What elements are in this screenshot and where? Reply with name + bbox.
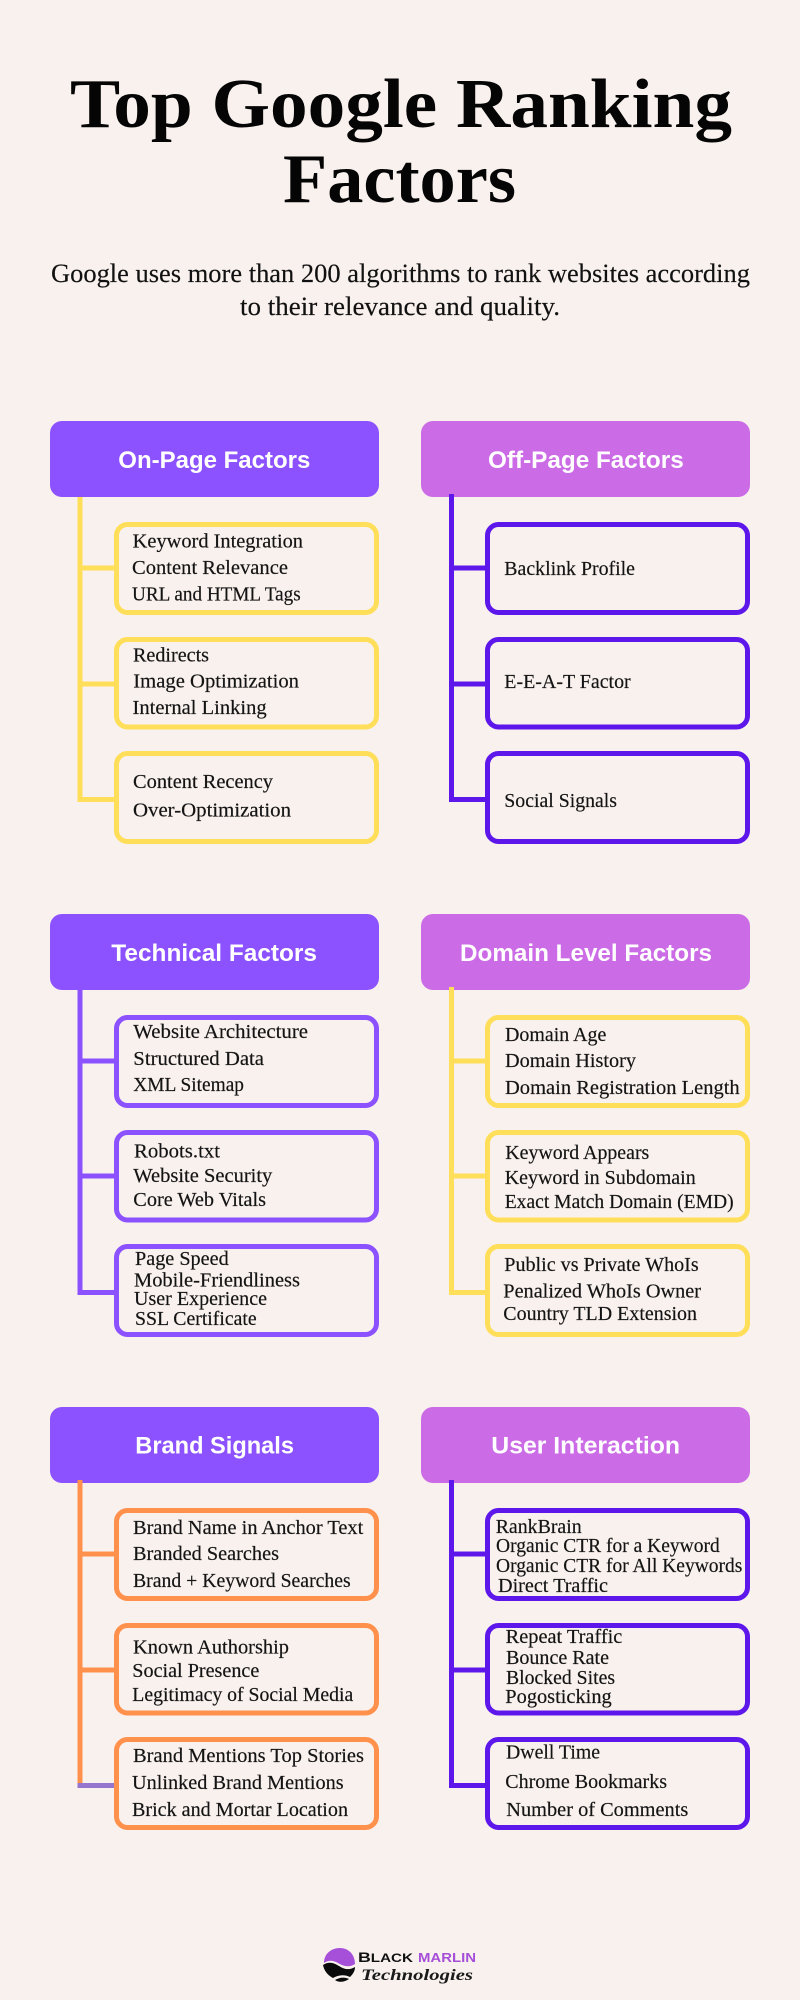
card: dwell time group xyxy=(488,1740,748,1828)
connector: brand lower branch xyxy=(78,1783,118,1788)
card: robots.txt group: Robots.txt xyxy=(134,1141,220,1163)
card: dwell time group: Dwell Time xyxy=(506,1742,600,1764)
title: Factors xyxy=(283,141,516,218)
card: whois group: Country TLD Extension xyxy=(503,1303,697,1325)
card: dwell time group: Number of Comments xyxy=(506,1799,689,1821)
card: brand name group xyxy=(116,1510,376,1598)
card: content recency group xyxy=(116,754,376,842)
heading: user interaction xyxy=(421,1407,750,1483)
card: domain age group: Domain History xyxy=(505,1050,636,1072)
card: whois group xyxy=(488,1246,748,1334)
card: brand name group: Branded Searches xyxy=(133,1543,279,1565)
card: redirects group xyxy=(116,640,376,727)
card: website architecture group xyxy=(116,1018,376,1106)
card: domain age group: Domain Registration Length xyxy=(505,1077,740,1099)
card: repeat traffic group: Blocked Sites xyxy=(506,1667,615,1689)
panel: technical factors xyxy=(50,914,379,1334)
connector: domain tree xyxy=(449,987,488,1292)
card: known authorship group: Social Presence xyxy=(132,1660,259,1682)
card: page speed group: Mobile-Friendliness xyxy=(134,1270,300,1292)
card: brand mentions group: Unlinked Brand Mentions xyxy=(132,1772,344,1794)
card: keyword appears group: Keyword Appears xyxy=(505,1142,650,1164)
card: repeat traffic group xyxy=(488,1626,748,1713)
card: repeat traffic group: Bounce Rate xyxy=(506,1647,609,1669)
card: keyword integration group: Keyword Integration xyxy=(133,531,303,553)
card: e-e-a-t factor: E-E-A-T Factor xyxy=(504,671,631,693)
logo wordmark xyxy=(358,1949,476,1984)
card: website architecture group: Website Architecture xyxy=(133,1021,308,1043)
card: brand name group: Brand Name in Anchor Text xyxy=(133,1517,364,1539)
card: brand mentions group: Brand Mentions Top Stories xyxy=(133,1745,364,1767)
icon: marlin globe xyxy=(323,1948,355,1982)
card: dwell time group: Chrome Bookmarks xyxy=(505,1771,667,1793)
card: redirects group: Image Optimization xyxy=(133,671,299,693)
card: content recency group: Over-Optimization xyxy=(133,800,291,822)
card: page speed group xyxy=(116,1246,376,1334)
card: social signals: Social Signals xyxy=(504,790,617,812)
card: whois group: Public vs Private WhoIs xyxy=(504,1254,699,1276)
card: keyword appears group: Keyword in Subdomain xyxy=(505,1167,696,1189)
heading: technical factors xyxy=(50,914,379,990)
card: repeat traffic group: Pogosticking xyxy=(505,1686,612,1708)
title: Top Google Ranking xyxy=(70,66,732,143)
heading: off-page factors: Off-Page Factors xyxy=(488,447,684,474)
heading: brand signals: Brand Signals xyxy=(135,1432,294,1460)
card: backlink profile: Backlink Profile xyxy=(504,558,635,580)
card: keyword integration group: Content Relevance xyxy=(132,557,288,579)
card: keyword appears group xyxy=(488,1132,748,1220)
card: redirects group: Internal Linking xyxy=(132,697,267,719)
connector: user interaction tree xyxy=(449,1480,488,1788)
subtitle: to their relevance and quality. xyxy=(240,292,560,321)
heading: on-page factors: On-Page Factors xyxy=(118,447,310,474)
card: keyword integration group xyxy=(116,524,376,612)
connector: technical tree xyxy=(78,990,116,1292)
panel: domain level factors xyxy=(421,914,750,1334)
card: backlink profile xyxy=(488,524,748,612)
connector: brand tree xyxy=(78,1480,116,1788)
heading: domain level factors: Domain Level Factors xyxy=(460,940,712,967)
heading: domain level factors xyxy=(421,914,750,990)
card: domain age group: Domain Age xyxy=(505,1024,606,1046)
card: content recency group: Content Recency xyxy=(133,771,273,793)
logo wordmark: MARLIN xyxy=(418,1951,476,1965)
card: social signals xyxy=(488,754,748,842)
card: robots.txt group: Core Web Vitals xyxy=(133,1189,266,1211)
card: website architecture group: XML Sitemap xyxy=(133,1074,244,1096)
card: robots.txt group xyxy=(116,1132,376,1220)
card: brand name group: Brand + Keyword Searches xyxy=(133,1570,351,1592)
card: known authorship group: Legitimacy of Social Media xyxy=(132,1684,353,1706)
connector: on-page tree xyxy=(78,497,116,800)
heading: user interaction: User Interaction xyxy=(491,1432,680,1460)
card: domain age group xyxy=(488,1018,748,1106)
card: rankbrain group: Direct Traffic xyxy=(498,1575,608,1597)
card: page speed group: SSL Certificate xyxy=(135,1308,257,1330)
panel: user interaction xyxy=(421,1407,750,1828)
card: website architecture group: Structured Data xyxy=(133,1048,264,1070)
subtitle: Google uses more than 200 algorithms to rank websites according xyxy=(51,259,750,288)
card: rankbrain group: RankBrain xyxy=(496,1516,582,1538)
card: keyword appears group: Exact Match Domain (EMD) xyxy=(505,1191,734,1213)
card: brand mentions group: Brick and Mortar Location xyxy=(132,1799,348,1821)
heading: brand signals xyxy=(50,1407,379,1483)
card: keyword integration group: URL and HTML Tags xyxy=(132,584,301,606)
card: known authorship group xyxy=(116,1626,376,1713)
card: page speed group: Page Speed xyxy=(135,1248,229,1270)
card: robots.txt group: Website Security xyxy=(133,1165,272,1187)
card: redirects group: Redirects xyxy=(133,645,209,667)
card: rankbrain group: Organic CTR for All Keywords xyxy=(496,1555,743,1577)
logo: black marlin technologies xyxy=(323,1948,476,1984)
connector: off-page tree xyxy=(449,494,488,800)
card: brand mentions group xyxy=(116,1740,376,1828)
subtitle xyxy=(51,259,750,321)
card: rankbrain group xyxy=(488,1510,748,1598)
logo wordmark: Technologies xyxy=(361,1967,473,1984)
logo wordmark: BLACK xyxy=(358,1949,413,1965)
card: known authorship group: Known Authorship xyxy=(133,1636,289,1658)
heading: technical factors: Technical Factors xyxy=(111,940,317,967)
panel: off-page factors xyxy=(421,421,750,842)
card: whois group: Penalized WhoIs Owner xyxy=(503,1281,701,1303)
card: rankbrain group: Organic CTR for a Keyword xyxy=(496,1535,720,1557)
title xyxy=(70,66,732,218)
heading: on-page factors xyxy=(50,421,379,497)
card: page speed group: User Experience xyxy=(134,1288,267,1310)
card: repeat traffic group: Repeat Traffic xyxy=(506,1626,622,1648)
card: e-e-a-t factor xyxy=(488,640,748,727)
panel: on-page factors xyxy=(50,421,379,842)
heading: off-page factors xyxy=(421,421,750,497)
panel: brand signals xyxy=(50,1407,379,1828)
